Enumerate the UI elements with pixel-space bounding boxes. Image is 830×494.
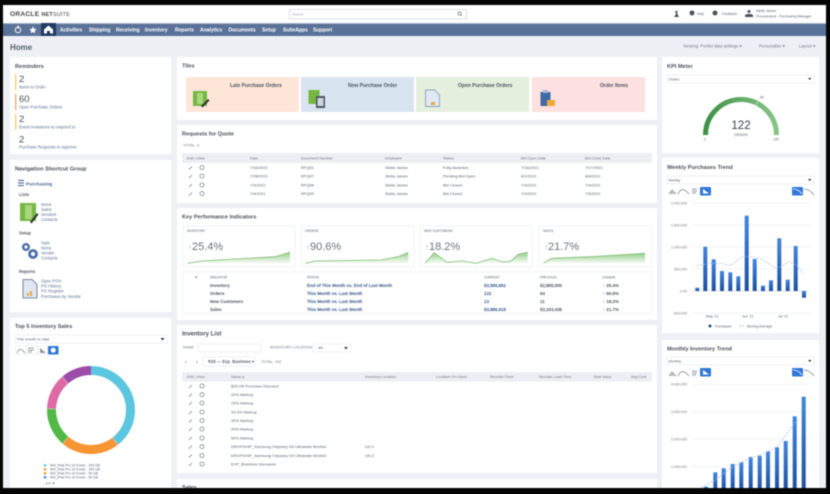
kpi summary table: Inventory (210, 283, 230, 288)
inventory pager: ‹ (185, 360, 187, 366)
nav icons (15, 23, 56, 36)
nav items: Support (313, 28, 332, 34)
inventory rows: 25% Markup (231, 400, 254, 406)
inventory rows: DROPSHIP_Samsung Odyssey G9 Ultrawide Monitor (231, 444, 327, 449)
gauge: 122 (731, 120, 751, 132)
kpi summary table: PREVIOUS (540, 276, 556, 280)
tile: order items (532, 77, 645, 112)
reminder: open purchase orders: 60 (19, 94, 30, 105)
weekly dropdown: Weekly (668, 178, 680, 182)
rfq table rows: 7/4/2021 (521, 191, 537, 196)
reminder: event invitations: Event Invitations to respond to (19, 124, 76, 130)
inventory table header: Reorder Point (490, 375, 514, 379)
kpi card: inventory (183, 226, 295, 266)
page heading: Home (10, 43, 33, 52)
rfq table rows: 8/8/2021 (585, 174, 601, 178)
reports links (41, 278, 81, 299)
kpi summary table: End of This Month vs. End of Last Month (307, 283, 392, 288)
nav items: SuiteApps (283, 28, 308, 34)
inventory rows: US-1 (365, 444, 375, 449)
inventory table header: Edit | View (187, 375, 205, 379)
setup links: Contacts (41, 256, 58, 260)
page options: Layout ▾ (799, 44, 815, 48)
rfq table rows: 7/3/2021 (250, 182, 266, 188)
monthly y axis: 4,000,000 (671, 382, 687, 386)
inventory filters: - All - (316, 345, 326, 350)
panel: reminders: Reminders (15, 64, 44, 70)
kpi summary table: Orders (210, 291, 225, 296)
rfq table rows: 8/1/2021 (521, 174, 537, 178)
panel: key performance indicators (177, 208, 657, 320)
inventory table header: Name ▴ (231, 375, 244, 379)
kpi summary table (183, 272, 652, 314)
donut legend: WH_iPad Pro 10.9-inch - 200 GB (50, 468, 101, 472)
page options: Viewing: Portlet data settings ▾ (683, 44, 742, 48)
header user tools: Stella James (756, 9, 776, 13)
rfq table rows: 7/16/2021 (250, 165, 269, 170)
kpi card: inventory: ↑25.4% (188, 241, 223, 253)
setup links: Vendor (41, 250, 55, 256)
panel: navigation shortcut group: Setup (19, 230, 31, 236)
rfq table rows: RFQ08 (301, 182, 315, 188)
page options: Personalize ▾ (759, 44, 785, 48)
lists links: Sales (41, 207, 51, 212)
panel: inventory list: Inventory List (182, 332, 221, 338)
kpi summary table: CURRENT (484, 276, 500, 280)
rfq table rows: Stella James (385, 174, 408, 178)
panel: kpi meter (662, 57, 819, 153)
rfq table rows: Stella James (385, 165, 408, 170)
monthly y axis: 3,000,000 (671, 410, 687, 414)
rfq table rows: RFQ09 (301, 191, 315, 196)
inventory rows: 35% Markup (231, 418, 254, 423)
tile: order items: Order Items (600, 83, 628, 89)
kpi card: orders: ↑90.6% (306, 241, 341, 253)
inventory rows: 33.3% Markup (231, 410, 258, 414)
donut legend: WH_iPad Pro 10.9-inch - 200 GB (50, 464, 101, 468)
kpi summary table: PERIOD (307, 276, 320, 280)
purchasing heading: Purchasing (26, 182, 52, 188)
inventory pager (185, 357, 281, 366)
weekly x axis: Jun '21 (742, 314, 753, 318)
kpi summary table: INDICATOR (210, 276, 228, 280)
inventory rows: EXP_Business Insurance (231, 462, 277, 466)
panel: monthly inventory trend: Monthly Inventory Trend (667, 346, 733, 352)
reminder: items to order: Items to Order (19, 84, 46, 90)
panel: reminders (10, 57, 171, 154)
reminder: open purchase orders (15, 94, 62, 110)
kpi summary table: $3,886,919 (484, 307, 507, 312)
rfq table rows: 7/28/2021 (250, 174, 269, 178)
weekly y axis: 1,500,000 (671, 224, 687, 228)
kpi summary table: ↑ 21.7% (603, 307, 619, 312)
monthly y axis: 2,000,000 (671, 438, 687, 442)
inventory rows: US-2 (365, 453, 375, 458)
weekly y axis: 1,000,000 (671, 246, 687, 250)
header bar (0, 5, 830, 23)
inventory rows: $25 Off Purchase Discount (231, 384, 280, 388)
kpi card: sales: SALES (543, 229, 553, 233)
donut legend (43, 464, 101, 486)
reminder: event invitations (15, 114, 76, 130)
tile: open purchase orders (416, 77, 529, 112)
reminder: purchase requests (19, 134, 77, 150)
nav items (60, 28, 332, 34)
donut chart (52, 370, 130, 450)
reminder: event invitations: 2 (19, 114, 24, 125)
donut legend: WH_iPad Pro 10.9-inch - 50 GB (50, 472, 99, 476)
rfq table header: Bid Open Date (521, 156, 546, 160)
reports links: Open PO's (41, 278, 61, 284)
donut legend: ↓ 1/4 ▼ (43, 482, 55, 486)
kpi card: sales: ↑21.7% (544, 241, 579, 253)
inventory table header: Avg Cost (631, 375, 647, 379)
rfq table rows: RFQ07 (301, 174, 315, 178)
weekly legend: Moving Average (747, 324, 772, 328)
setup links: Items (41, 246, 51, 250)
kpi summary table: CHANGE (602, 276, 616, 280)
rfq table rows: Stella James (385, 191, 408, 196)
search box: Search (292, 12, 303, 16)
logo: ORACLE NETSUITE (10, 11, 70, 18)
panel: monthly inventory trend (662, 340, 819, 492)
reminder: open purchase orders: Open Purchase Orders (19, 104, 62, 110)
monthly bars (704, 397, 806, 491)
inventory edit and view icons (189, 384, 204, 466)
icon: gears (23, 244, 36, 258)
panel: navigation shortcut group: Reports (19, 269, 36, 274)
kpi summary table: ↑ 90.6% (603, 291, 619, 296)
weekly y axis: 0.00 (680, 290, 687, 294)
panel: top 5 inventory sales (10, 318, 171, 488)
kpi card: new customers: ↑18.2% (425, 241, 460, 253)
chart type buttons (16, 346, 58, 354)
header user tools: Feedback (722, 12, 737, 16)
panel: requests for quote: Requests for Quote (182, 132, 234, 138)
panel: requests for quote: TOTAL: 4 (183, 144, 199, 148)
kpi summary table: 122 (484, 291, 492, 296)
monthly y axis (671, 382, 687, 469)
kpi summary table: Sales (210, 307, 222, 312)
icon: lists (20, 203, 38, 224)
kpi summary table: $3,595,861 (484, 283, 507, 288)
nav items: Reports (175, 28, 194, 34)
kpi summary table: 13 (484, 299, 489, 304)
tile: new purchase order: New Purchase Order (348, 83, 397, 89)
gauge: 0 (704, 138, 706, 142)
inventory pager: R25 — Exp_Business ▾ (208, 359, 255, 364)
panel: navigation shortcut group (10, 160, 171, 312)
tile: new purchase order (301, 77, 414, 112)
reports links: Purchases by Vendor (41, 294, 81, 299)
rfq table rows: Pending Bid Open (443, 174, 475, 178)
monthly y axis: 1,000,000 (671, 465, 687, 469)
kpi summary table: $2,865,000 (540, 283, 563, 288)
gauge: 120 (773, 138, 779, 142)
panel: sales: Sales (182, 485, 197, 491)
rfq table header: Bid Close Date (585, 156, 610, 160)
weekly x axis: Jul '21 (778, 314, 788, 318)
weekly chart type buttons (668, 187, 814, 196)
weekly dropdown (667, 176, 814, 184)
kpi summary table: This Month vs. Last Month (307, 299, 363, 304)
inventory filters: NAME (183, 346, 194, 350)
kpi card: orders: ORDERS (305, 229, 319, 233)
inventory rows: 40% Markup (231, 426, 254, 432)
reports links: PO History (41, 284, 62, 288)
gauge: ORDERS (734, 133, 748, 137)
panel: weekly purchases trend (662, 158, 819, 333)
panel: tiles: Tiles (182, 64, 195, 70)
rfq table rows: 7/17/2021 (585, 165, 604, 170)
panel: top 5 inventory sales: Top 5 Inventory Sales (15, 324, 72, 330)
rfq table header: Document Number (301, 156, 334, 160)
kpi summary table: This Month vs. Last Month (307, 307, 363, 312)
setup links: Task (41, 240, 51, 246)
period dropdown: This month to date (16, 336, 50, 342)
inventory rows: DROPSHIP_Samsung Odyssey G9 Ultrawide Monitor (231, 453, 327, 458)
rfq table rows: Stella James (385, 182, 408, 188)
kpi summary table: ↑ 25.4% (603, 283, 619, 288)
weekly x axis (706, 314, 788, 318)
kpi card: sales (539, 226, 652, 266)
panel: kpi meter: KPI Meter (667, 64, 694, 70)
weekly moving average line (697, 256, 803, 273)
reminder: items to order (15, 74, 46, 90)
kpi summary table: 64 (540, 291, 545, 296)
panel: weekly purchases trend: Weekly Purchases Trend (667, 165, 733, 171)
weekly y axis: 2,000,000 (671, 202, 687, 206)
rfq table rows: 7/16/2021 (521, 165, 540, 170)
nav items: Shipping (89, 28, 110, 34)
weekly x axis: May '21 (706, 314, 718, 318)
kpi card: inventory: INVENTORY (187, 229, 206, 233)
rfq table header: Date (250, 156, 258, 160)
nav items: Documents (228, 28, 256, 34)
lists links: Items (41, 202, 51, 207)
monthly chart type buttons (668, 368, 814, 376)
kpi summary table: 11 (540, 299, 545, 304)
rfq table rows: 7/3/2021 (521, 182, 537, 188)
panel: key performance indicators: Key Performance Indicators (182, 214, 256, 220)
inventory rows: 50% Markup (231, 436, 254, 440)
weekly legend: Purchases (715, 324, 732, 328)
inventory rows: 20% Markup (231, 392, 254, 397)
rfq table rows: Bid Closed (443, 191, 462, 196)
weekly y axis (671, 202, 687, 316)
panel: navigation shortcut group: Lists (19, 192, 30, 197)
monthly dropdown (667, 357, 814, 365)
rfq table header: Status (443, 156, 454, 160)
tile: open purchase orders: Open Purchase Orders (458, 83, 513, 89)
nav items: Activities (60, 28, 82, 34)
header user tools: Procurement - Purchasing Manager (756, 14, 812, 18)
orders dropdown: Orders (668, 78, 680, 82)
panel: requests for quote (177, 125, 657, 203)
inventory table header: Inventory Location (365, 375, 396, 379)
header user tools: Help (697, 12, 704, 16)
nav items: Setup (262, 28, 276, 34)
rfq table rows: RFQ01 (301, 165, 315, 170)
inventory pager: TOTAL: 192 (261, 360, 281, 364)
reminder: purchase requests: 2 (19, 134, 24, 146)
kpi card: orders (302, 226, 414, 266)
rfq table header (182, 153, 652, 163)
kpi summary table: New Customers (210, 299, 244, 304)
panel: navigation shortcut group: Navigation Shortcut Group (15, 166, 87, 172)
kpi card: new customers (420, 226, 532, 266)
panel: sales (177, 479, 657, 491)
inventory table header: Total Value (593, 375, 612, 379)
donut legend: WH_iPad Pro 10.9-inch - 50 GB (50, 476, 99, 480)
nav items: Inventory (145, 28, 168, 34)
purchasing heading (18, 180, 52, 188)
period dropdown (15, 335, 167, 343)
inventory table header (182, 372, 652, 382)
kpi summary table: ▼ (194, 276, 198, 280)
inventory filters (183, 344, 351, 352)
lists links: Vendors (41, 212, 56, 217)
weekly legend (708, 324, 772, 328)
gauge (704, 96, 779, 142)
tile: late purchase orders (186, 77, 299, 112)
rfq table header: Employee (385, 156, 402, 160)
rfq table rows: 7/4/2021 (585, 182, 601, 188)
header user tools (674, 9, 812, 18)
rfq table rows (189, 165, 604, 196)
inventory filters: INVENTORY LOCATION (270, 346, 312, 350)
rfq table rows: Fully Awarded (443, 165, 468, 170)
nav items: Receiving (116, 28, 140, 34)
panel: tiles (177, 57, 657, 120)
reminder: purchase requests: Purchase Requests to Approve (19, 144, 77, 150)
orders dropdown (667, 75, 814, 83)
reminder: items to order: 2 (19, 74, 24, 85)
monthly dropdown: Monthly (668, 360, 681, 364)
weekly y axis: 500,000 (674, 268, 687, 272)
inventory table header: Location On Hand (436, 375, 467, 379)
panel: inventory list (177, 325, 657, 473)
inventory table header: Reorder Lead Time (539, 375, 572, 379)
inventory rows (231, 384, 375, 466)
rfq table rows: Bid Closed (443, 182, 462, 188)
rfq table rows: 7/4/2021 (250, 191, 266, 196)
reports links: PO Register (41, 288, 64, 294)
inventory pager: › (196, 360, 198, 366)
weekly y axis: -500,000 (673, 312, 687, 316)
kpi summary table: ↑ 18.2% (603, 299, 619, 304)
monthly moving average line (693, 418, 799, 492)
gauge: 60 (760, 96, 764, 100)
search box (290, 10, 466, 19)
kpi summary table: This Month vs. Last Month (307, 291, 363, 296)
weekly bars (695, 216, 806, 298)
navigation bar (0, 23, 830, 36)
rfq table rows: 7/5/2021 (585, 191, 601, 196)
setup links (41, 240, 58, 260)
tile: late purchase orders: Late Purchase Orders (230, 83, 282, 89)
icon: report document (23, 280, 37, 298)
kpi summary table: $3,193,436 (540, 307, 563, 312)
page options (683, 44, 815, 48)
lists links (41, 202, 58, 222)
kpi card: new customers: NEW CUSTOMERS (424, 229, 453, 233)
nav items: Analytics (200, 28, 222, 34)
lists links: Contacts (41, 217, 58, 222)
rfq table header: Edit | View (187, 156, 205, 160)
